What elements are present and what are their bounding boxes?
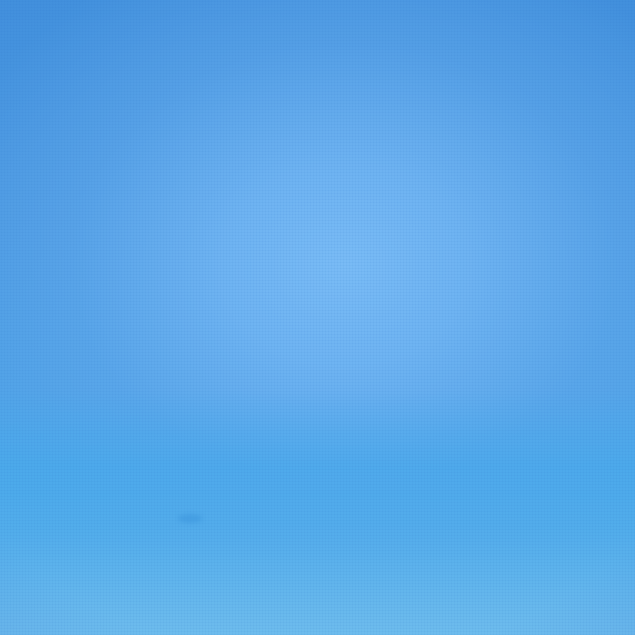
lower light band: [0, 390, 635, 635]
small dark smudge: [178, 514, 202, 523]
